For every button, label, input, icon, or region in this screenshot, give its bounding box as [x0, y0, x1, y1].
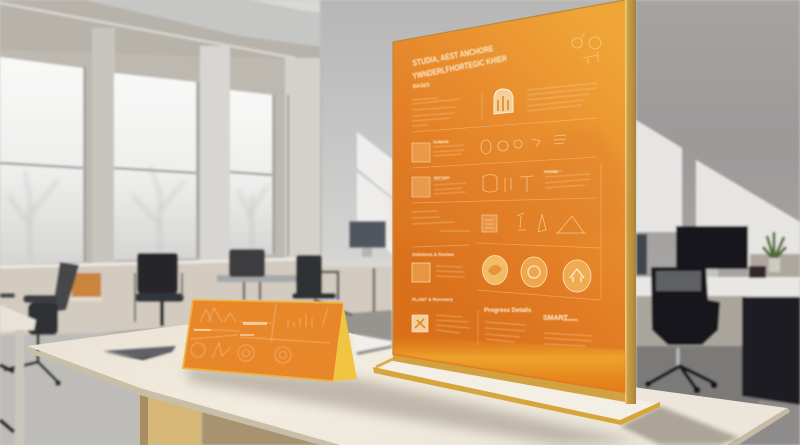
- acrylic stand: [373, 0, 660, 425]
- wainscot: [0, 258, 392, 335]
- wood leg dark: [202, 395, 345, 445]
- tent card face: [183, 300, 343, 381]
- monitor partial: [636, 234, 647, 275]
- chair 4: [292, 255, 352, 315]
- circular medallions: [482, 256, 591, 292]
- back desks: [217, 275, 299, 282]
- tent card side: [333, 303, 357, 381]
- desk clutter: [749, 266, 766, 278]
- right wall: [636, 0, 800, 290]
- small picture icon lower: [412, 315, 428, 332]
- chair 3: [229, 249, 265, 277]
- orange box: [72, 273, 101, 297]
- small side table: [0, 305, 36, 332]
- beam line: [0, 3, 295, 58]
- base back rail: [393, 354, 625, 402]
- right chair: [645, 267, 720, 394]
- floor: [0, 310, 392, 445]
- panel bottom golden band: [394, 335, 625, 392]
- desk: [27, 324, 790, 445]
- window pillar one: [92, 28, 115, 263]
- panel hazy silhouette: [395, 130, 624, 240]
- base shadow: [620, 406, 740, 445]
- small picture icon: [412, 263, 430, 282]
- icon row 1: [412, 135, 566, 162]
- desk edge band: [27, 347, 340, 445]
- window left: [0, 57, 83, 265]
- top-right icon: [572, 33, 601, 64]
- left wall above windows: [0, 0, 345, 60]
- wood leg light: [140, 385, 202, 445]
- back wall: [320, 0, 640, 320]
- section dividers: [412, 92, 601, 345]
- icon row 3: [482, 213, 586, 233]
- orange panel: [393, 0, 625, 393]
- base front rail: [373, 367, 660, 425]
- ceiling bulkhead: [85, 0, 350, 47]
- panel body text lines: [412, 83, 597, 346]
- floor right: [636, 345, 800, 445]
- icon: central badge: [494, 89, 513, 114]
- section headings: Centres: [563, 317, 579, 322]
- section headings: CLIMATE: [433, 140, 449, 144]
- chair 2: [135, 253, 184, 326]
- section headings: BATTERY: [434, 176, 451, 180]
- base tray surface: [373, 356, 660, 424]
- section headings: Progress Details: [484, 308, 532, 314]
- title: BASES: [413, 83, 430, 90]
- window mullions: [0, 66, 288, 262]
- section headings: FUTURE: [544, 170, 559, 174]
- window wall: [0, 50, 322, 265]
- section headings: Solutions & Review: [412, 252, 454, 257]
- left chair: [0, 262, 79, 386]
- plant: [763, 232, 786, 272]
- trees outside: [8, 165, 268, 260]
- window right: [230, 90, 272, 256]
- tent card: [183, 300, 357, 381]
- section headings: SMART: [543, 315, 569, 322]
- section headings: [412, 140, 579, 322]
- section headings: PLANT & Recovery: [412, 297, 454, 302]
- wood leg edge: [140, 385, 148, 445]
- icon row 2: [412, 174, 534, 197]
- tent card shadow: [186, 366, 640, 445]
- tablet: [103, 346, 176, 360]
- monitor: [349, 221, 386, 248]
- gold right post: [625, 0, 636, 404]
- title: STUDIA, AEST ANCHORE: [412, 43, 494, 68]
- window pillar two: [200, 46, 230, 261]
- drawer cabinet: [742, 297, 800, 405]
- title: [411, 43, 508, 90]
- desk right edge band: [727, 408, 790, 445]
- window middle: [114, 73, 196, 260]
- title: YWNDERLFHORTEGIC KHIER: [411, 53, 508, 81]
- desk top: [27, 324, 787, 445]
- monitor right: [676, 226, 748, 269]
- window pillar three: [285, 58, 320, 263]
- sunlight patches on back wall: [357, 132, 393, 198]
- sunlight patch one on right wall: [636, 120, 682, 232]
- tent card charts: [190, 304, 330, 363]
- sunlight patch two on right wall: [696, 160, 800, 268]
- notebook: [353, 334, 392, 355]
